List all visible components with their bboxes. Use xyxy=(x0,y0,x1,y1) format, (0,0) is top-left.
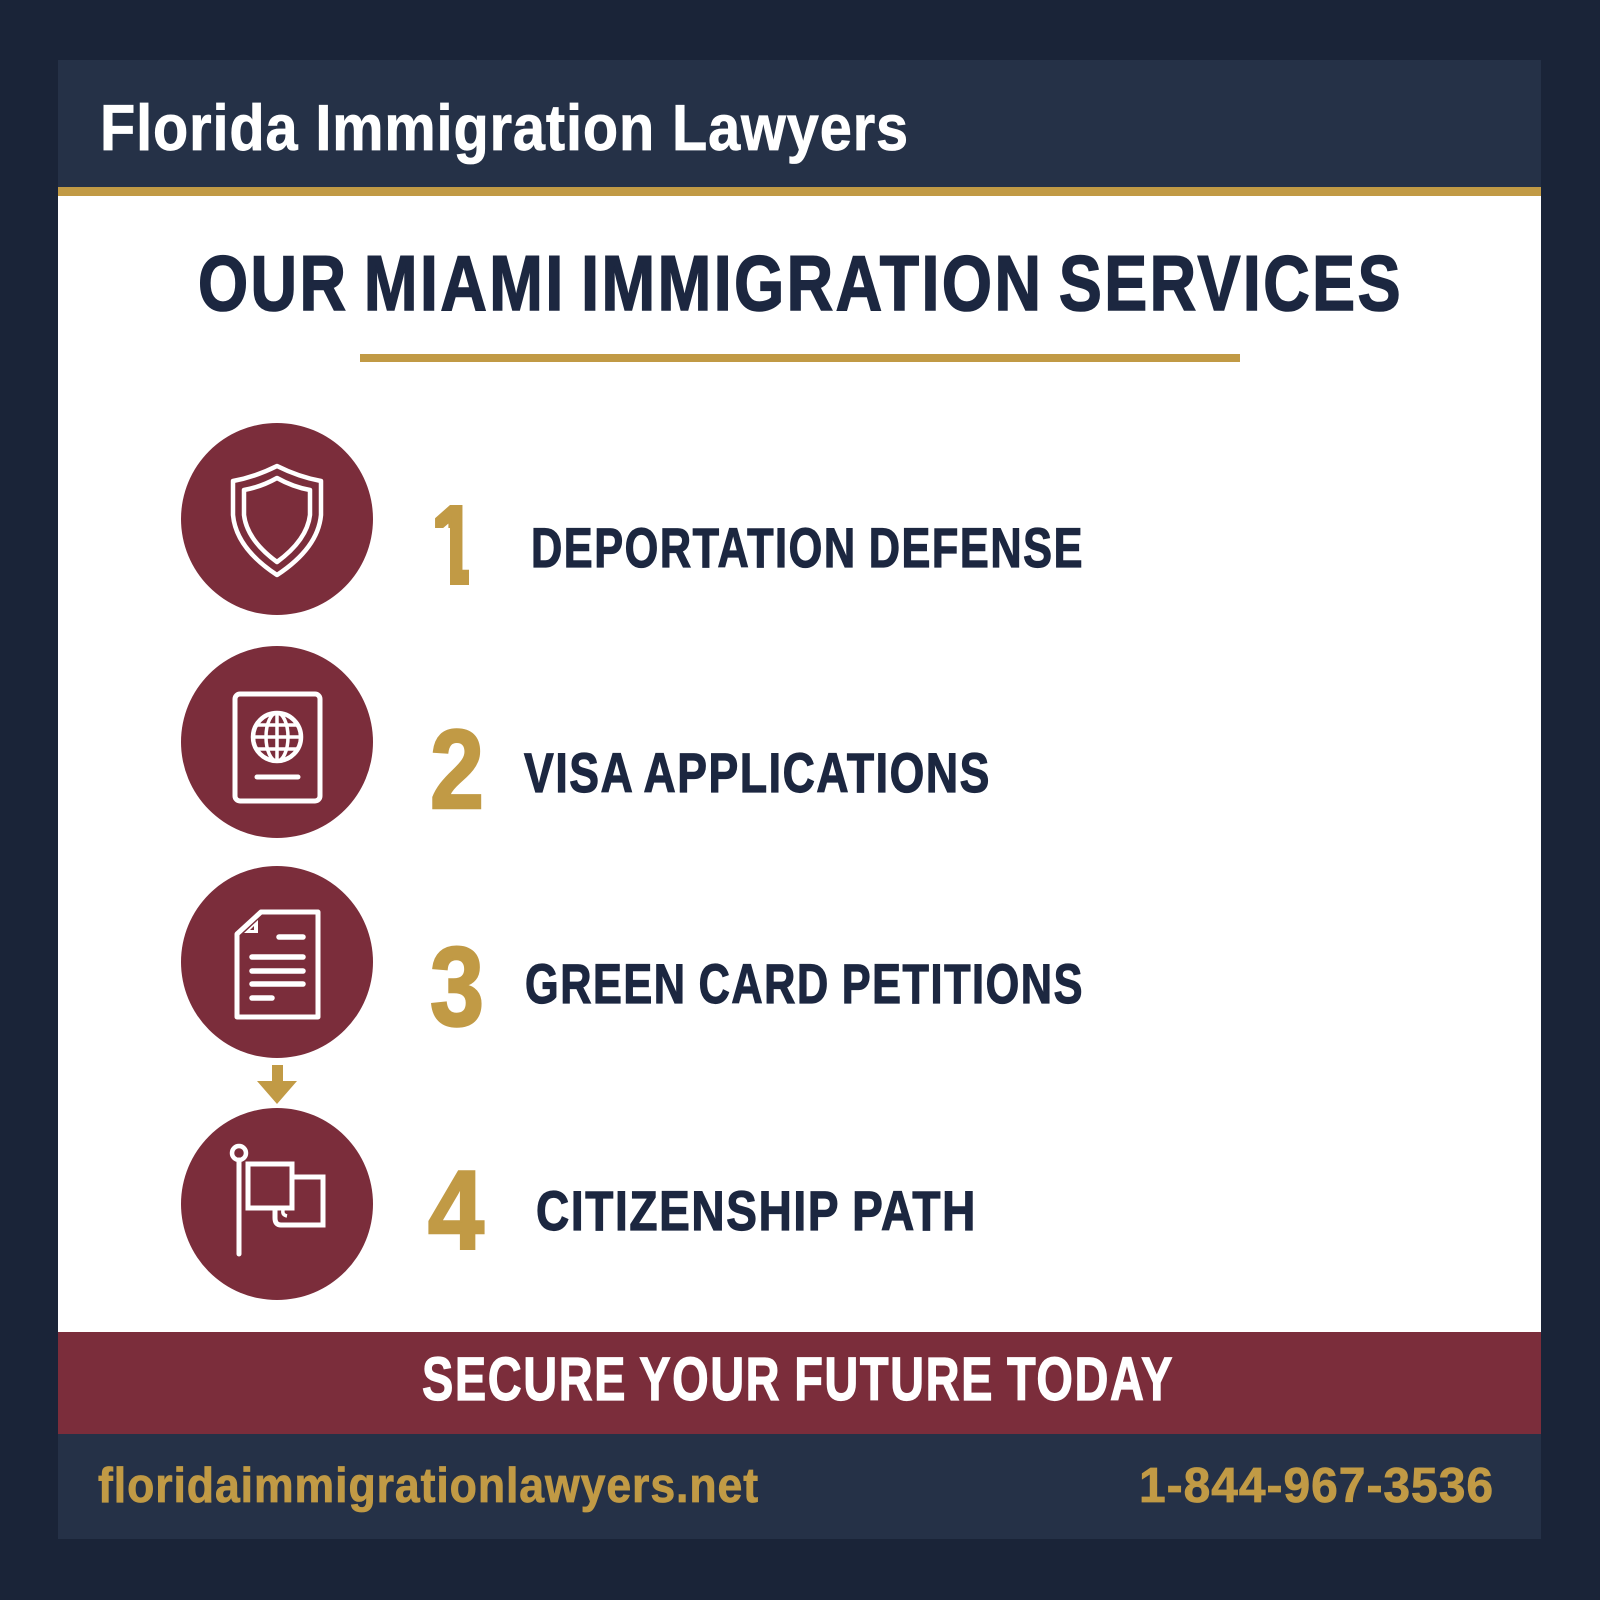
panel: header band xyxy=(58,60,1541,187)
number 4: 4 xyxy=(428,1148,484,1273)
website: floridaimmigrationlawyers.net xyxy=(98,1459,759,1513)
header title: Florida Immigration Lawyers xyxy=(100,91,909,164)
label: citizenship path: CITIZENSHIP PATH xyxy=(536,1179,977,1242)
phone number: 1-844-967-3536 xyxy=(1139,1459,1494,1513)
number 3: 3 xyxy=(430,924,484,1049)
service 2: visa applications xyxy=(181,646,991,838)
number 2: 2 xyxy=(430,707,484,832)
icon: shield xyxy=(181,423,373,615)
main heading xyxy=(198,239,1403,362)
label: deportation defense: DEPORTATION DEFENSE xyxy=(531,516,1084,579)
panel: services xyxy=(58,196,1541,1332)
panel: call to action band xyxy=(58,1332,1541,1434)
icon: flag xyxy=(181,1108,373,1300)
call to action text: SECURE YOUR FUTURE TODAY xyxy=(422,1345,1174,1413)
gold header rule xyxy=(58,187,1541,196)
number 1: 1 xyxy=(431,484,476,607)
label: visa applications: VISA APPLICATIONS xyxy=(524,741,991,804)
service 3: green card petitions xyxy=(181,866,1084,1058)
label: green card petitions: GREEN CARD PETITIONS xyxy=(525,952,1084,1015)
icon: document xyxy=(181,866,373,1058)
panel: footer band xyxy=(58,1434,1541,1539)
service 4: citizenship path xyxy=(181,1108,977,1300)
arrow: down to step 4 xyxy=(257,1065,297,1104)
icon: passport xyxy=(181,646,373,838)
service 1: deportation defense xyxy=(181,423,1084,615)
